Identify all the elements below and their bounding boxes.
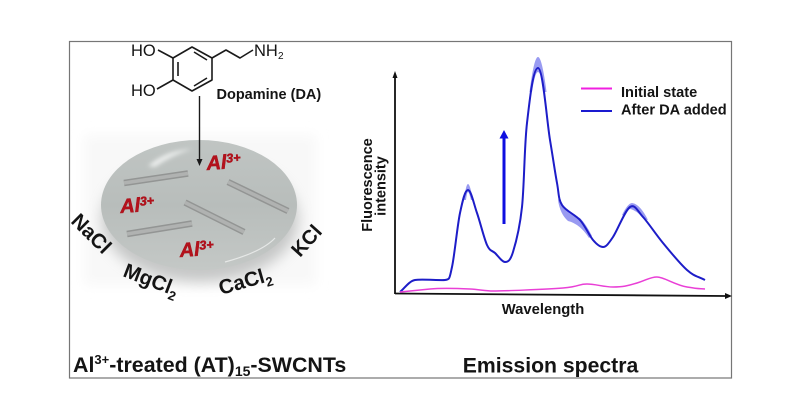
Al3+ ions: 3+	[199, 238, 215, 253]
y-axis label	[360, 138, 390, 232]
label: dopamine: Dopamine (DA)	[216, 87, 321, 103]
error band	[464, 57, 648, 238]
salt labels: CaCl	[216, 265, 267, 300]
panel: emission spectra chart	[360, 57, 732, 378]
disc with nanotubes and ions	[84, 135, 316, 285]
heading: left panel: -SWCNTs	[250, 353, 346, 377]
salt labels: NaCl	[66, 209, 116, 259]
Al3+ ions: Al	[179, 239, 200, 262]
chemical structure: dopamine: NH	[254, 42, 278, 60]
y-axis label: Fluorescence	[360, 138, 376, 232]
Al3+ ions: 3+	[226, 151, 242, 166]
panel: dopamine on treated surface	[66, 42, 346, 379]
Al3+ ions: Al	[206, 152, 227, 175]
y-axis label: intensity	[374, 156, 390, 216]
Al3+ ions	[118, 151, 242, 262]
legend	[581, 85, 727, 118]
heading: left panel: -treated (AT)	[109, 353, 235, 377]
arrow: intensity increase	[500, 130, 508, 224]
curve: initial state	[400, 277, 705, 292]
salt labels: 2	[264, 273, 275, 290]
heading: left panel: 15	[235, 363, 251, 379]
curve: after DA added	[400, 68, 705, 292]
nanotubes	[124, 174, 288, 234]
chemical structure: dopamine: HO	[131, 42, 156, 60]
outer frame	[70, 42, 732, 378]
legend: Initial state	[621, 85, 697, 101]
Al3+ ions: 3+	[139, 194, 155, 209]
salt labels: KCl	[287, 221, 327, 261]
chemical structure: dopamine	[131, 42, 284, 100]
chart axes	[392, 71, 732, 299]
salt labels: 2	[166, 287, 178, 304]
x-axis label: Wavelength	[502, 302, 584, 318]
salt labels	[66, 209, 327, 304]
legend: After DA added	[621, 102, 727, 118]
heading: right panel: Emission spectra	[463, 354, 638, 378]
chemical structure: dopamine: HO	[131, 82, 156, 100]
salt labels: MgCl	[120, 259, 175, 299]
heading: left panel: Al	[73, 353, 94, 377]
Al3+ ions: Al	[119, 195, 141, 218]
heading: left panel: 3+	[94, 352, 110, 367]
chemical structure: dopamine: 2	[278, 51, 284, 62]
arrow: dopamine to surface	[196, 96, 202, 166]
